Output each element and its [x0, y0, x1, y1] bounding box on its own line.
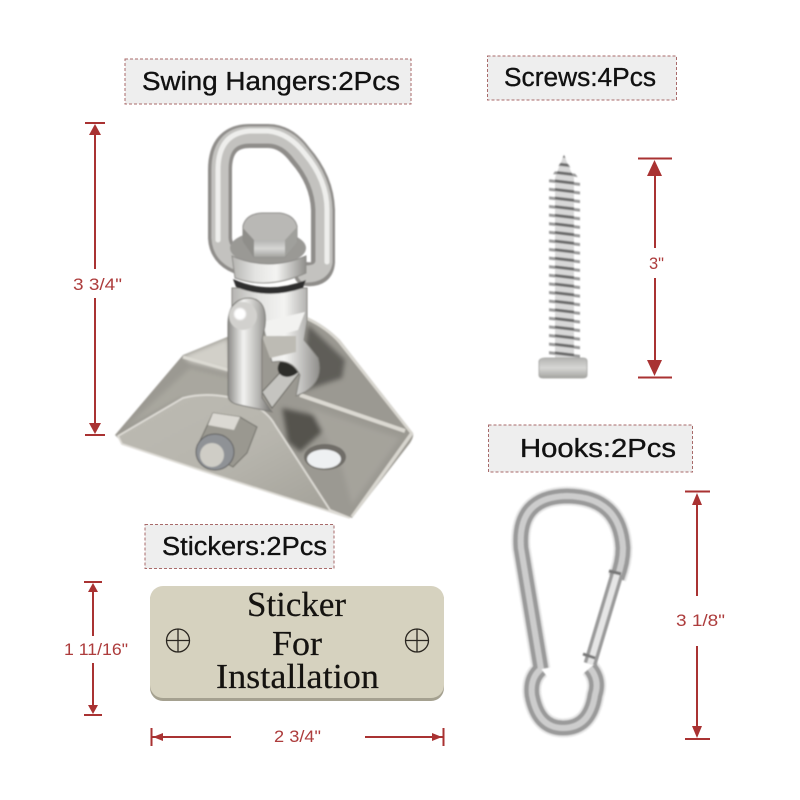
label: stickers: Stickers:2Pcs	[162, 533, 327, 561]
label: swing hangers: Swing Hangers:2Pcs	[142, 68, 400, 96]
dimension: screw length 3 inch: 3"	[649, 254, 664, 273]
dimension: hook length 3 1/8 inch	[676, 492, 725, 739]
side nut and bolt	[196, 413, 257, 470]
dimension: hanger height 3 3/4 inch: 3 3/4"	[73, 275, 122, 294]
screw head	[539, 358, 587, 378]
dimension: screw length 3 inch	[638, 158, 672, 378]
label: hooks: Hooks:2Pcs	[520, 435, 676, 463]
label: screws: Screws:4Pcs	[504, 64, 656, 92]
swivel barrel	[232, 288, 319, 396]
shackle	[228, 298, 272, 412]
dimension: sticker width 2 3/4 inch	[152, 727, 444, 746]
label: screws	[488, 56, 676, 100]
screw hole mark: right	[406, 629, 428, 652]
dimension: hook length 3 1/8 inch: 3 1/8"	[676, 611, 725, 630]
mounting hole	[304, 444, 346, 470]
swivel collar	[232, 256, 306, 294]
screw	[539, 155, 587, 378]
thread teeth	[549, 155, 580, 360]
spring gate sleeve	[583, 571, 621, 664]
sticker text: Installation	[216, 657, 379, 696]
hex bolt head	[243, 213, 297, 257]
label: hooks	[488, 425, 692, 472]
carabiner hook	[521, 496, 623, 728]
label: swing hangers	[125, 59, 411, 104]
sticker text: For	[272, 624, 322, 663]
bracket front plate	[118, 395, 350, 518]
hook wire	[521, 496, 623, 728]
sticker text	[216, 585, 379, 696]
cross pin	[262, 362, 300, 408]
sticker plate	[150, 585, 444, 701]
label: stickers	[145, 524, 334, 568]
screw hole mark: left	[166, 629, 190, 652]
dimension: hanger height 3 3/4 inch	[73, 123, 122, 435]
dimension: sticker height 1 11/16 inch: 1 11/16"	[64, 640, 128, 659]
sticker text: Sticker	[247, 585, 346, 624]
washer	[230, 231, 306, 265]
D ring	[218, 131, 327, 274]
dimension: sticker width 2 3/4 inch: 2 3/4"	[274, 727, 321, 746]
screw shaft	[555, 155, 574, 360]
bracket back plate	[115, 317, 413, 518]
dimension: sticker height 1 11/16 inch	[64, 582, 128, 715]
swing hanger photo illustration	[115, 131, 413, 518]
